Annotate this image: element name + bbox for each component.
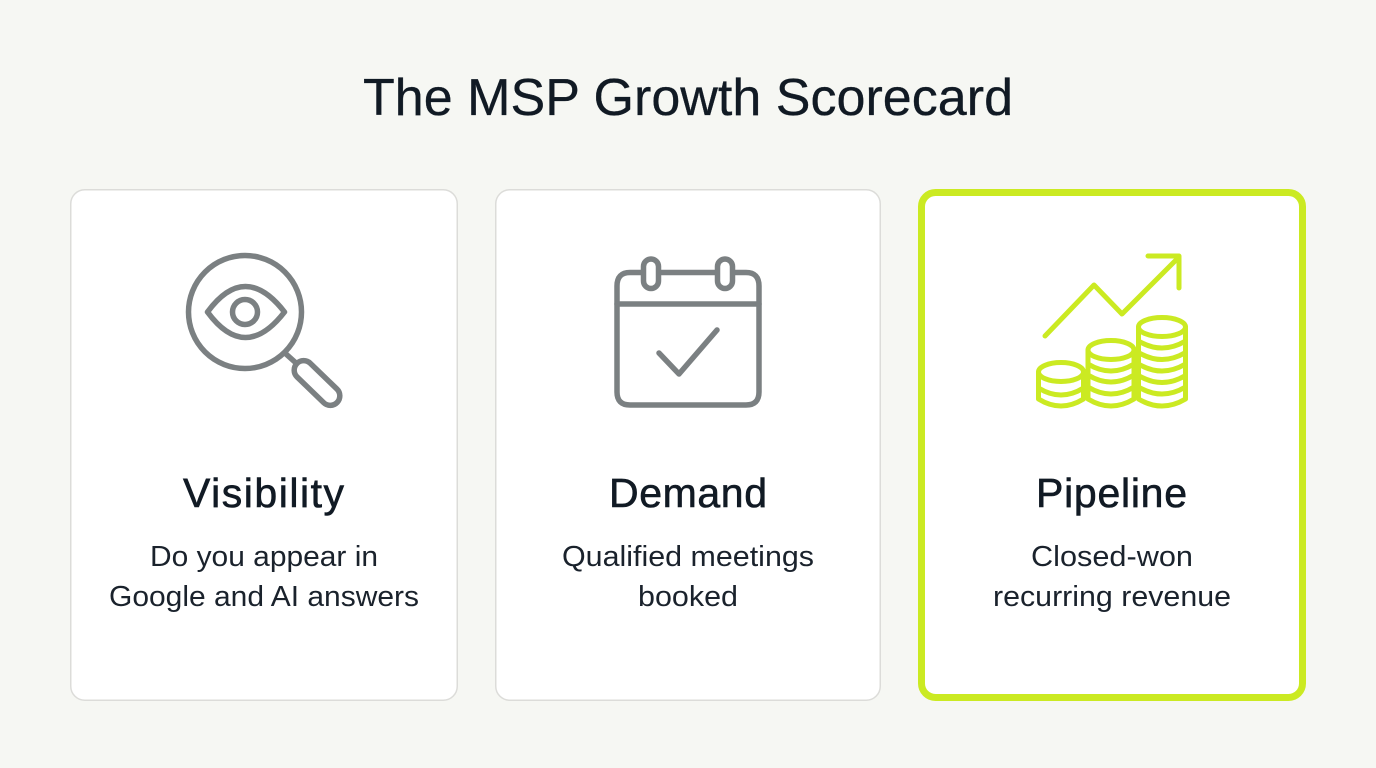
panel: visibility <box>71 190 457 700</box>
card: demand background <box>496 190 880 700</box>
card: visibility background <box>71 190 457 700</box>
text: pipeline description <box>993 541 1231 613</box>
text: demand description <box>562 541 814 613</box>
icon: calendar with check <box>617 259 759 405</box>
text: visibility description <box>109 541 419 613</box>
heading: visibility: Visibility <box>183 470 344 516</box>
text: pipeline description: recurring revenue <box>993 581 1231 613</box>
heading: demand: Demand <box>609 470 767 516</box>
text: visibility description: Do you appear in <box>150 541 378 573</box>
text: pipeline description: Closed-won <box>1031 541 1193 573</box>
panel: pipeline (highlighted) <box>922 192 1302 698</box>
panel: demand <box>496 190 880 700</box>
heading: pipeline: Pipeline <box>1036 470 1187 516</box>
text: demand description: Qualified meetings <box>562 541 814 573</box>
text: demand description: booked <box>638 581 738 613</box>
icon: magnifying glass with eye <box>188 256 344 409</box>
title: The MSP Growth Scorecard <box>363 69 1013 127</box>
card: pipeline background <box>922 192 1302 698</box>
text: visibility description: Google and AI answers <box>109 581 419 613</box>
icon: growth arrow and coin stacks <box>1038 256 1186 406</box>
